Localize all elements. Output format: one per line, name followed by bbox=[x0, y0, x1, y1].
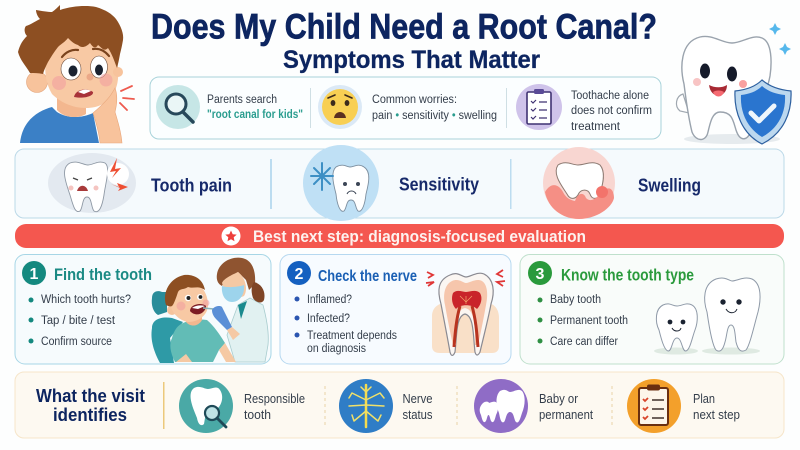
illustration: boy with toothache bbox=[18, 5, 134, 143]
panel: parent concerns bbox=[150, 77, 661, 139]
text: parents search bbox=[207, 94, 303, 121]
label bbox=[539, 392, 593, 422]
icon: magnifying glass bbox=[156, 85, 200, 129]
heading bbox=[36, 386, 145, 425]
text: common worries: Common worries: bbox=[372, 94, 457, 106]
heading: What the visit bbox=[36, 386, 145, 406]
title: Does My Child Need a Root Canal? bbox=[151, 8, 657, 46]
text: common worries: pain • sensitivity • swelling bbox=[372, 110, 497, 122]
heading: Check the nerve bbox=[318, 268, 417, 285]
illustration: smiling tooth with shield bbox=[676, 36, 791, 144]
icon: shield bbox=[735, 80, 791, 144]
badge 2 bbox=[287, 261, 311, 285]
illustration: dentist and child bbox=[151, 258, 268, 363]
list: Care can differ bbox=[550, 336, 618, 348]
list: Inflamed? bbox=[307, 294, 352, 306]
badge 3: 3 bbox=[536, 266, 545, 283]
icon: nerve status bbox=[339, 379, 393, 433]
subtitle: Symptoms That Matter bbox=[283, 46, 540, 74]
heading: Know the tooth type bbox=[561, 266, 694, 284]
text: toothache alone: Toothache alone bbox=[571, 90, 649, 102]
label: next step bbox=[693, 408, 740, 422]
text: toothache alone: treatment bbox=[571, 121, 621, 133]
illustration: baby tooth bbox=[654, 304, 698, 354]
label: sensitivity: Sensitivity bbox=[399, 174, 479, 194]
label bbox=[693, 392, 740, 422]
icon: plan clipboard bbox=[627, 379, 681, 433]
illustration: permanent tooth bbox=[702, 278, 760, 354]
list: on diagnosis bbox=[307, 343, 366, 355]
heading: Find the tooth bbox=[54, 265, 152, 284]
list bbox=[538, 294, 628, 348]
label: tooth pain: Tooth pain bbox=[151, 176, 232, 196]
text: parents search: Parents search bbox=[207, 94, 277, 106]
list: Infected? bbox=[307, 313, 350, 325]
list: Which tooth hurts? bbox=[41, 294, 131, 306]
label: permanent bbox=[539, 408, 593, 422]
text: toothache alone bbox=[571, 90, 652, 133]
list bbox=[28, 294, 131, 348]
card 1: find the tooth bbox=[15, 254, 271, 364]
label bbox=[402, 392, 433, 422]
card 3: know the tooth type bbox=[520, 254, 784, 364]
panel: symptoms bbox=[15, 145, 784, 221]
label: Nerve bbox=[402, 392, 433, 406]
heading: identifies bbox=[53, 405, 127, 425]
icon: swollen gum bbox=[543, 147, 615, 219]
icon: worried face bbox=[318, 85, 362, 129]
text: toothache alone: does not confirm bbox=[571, 105, 652, 117]
label: swelling: Swelling bbox=[638, 176, 701, 196]
panel: what the visit identifies bbox=[15, 372, 784, 438]
badge 1 bbox=[22, 261, 46, 285]
icon: sparkles bbox=[769, 23, 791, 55]
badge 2: 2 bbox=[295, 266, 304, 283]
badge 1: 1 bbox=[30, 266, 39, 283]
text: common worries bbox=[372, 94, 497, 122]
list: Confirm source bbox=[41, 336, 112, 348]
icon: baby or permanent bbox=[474, 379, 528, 433]
label: Plan bbox=[693, 392, 715, 406]
icon: tooth pain bbox=[48, 153, 136, 213]
list: Baby tooth bbox=[550, 294, 601, 306]
badge 3 bbox=[528, 261, 552, 285]
list: Permanent tooth bbox=[550, 315, 628, 327]
card 2: check the nerve bbox=[280, 254, 511, 364]
illustration: tooth cross-section bbox=[426, 270, 505, 355]
list: Tap / bite / test bbox=[41, 315, 116, 327]
banner: best next step: Best next step: diagnosis-focused evaluation bbox=[253, 228, 586, 246]
icon: sensitivity bbox=[303, 145, 379, 221]
list: Treatment depends bbox=[307, 330, 397, 342]
label: Baby or bbox=[539, 392, 578, 406]
label: tooth bbox=[244, 408, 271, 422]
label: status bbox=[402, 408, 432, 422]
icon: responsible tooth bbox=[179, 379, 233, 433]
label: Responsible bbox=[244, 392, 305, 406]
banner: best next step bbox=[15, 224, 784, 248]
icon: checklist bbox=[516, 84, 562, 130]
label bbox=[244, 392, 305, 422]
list bbox=[294, 294, 397, 355]
text: parents search: "root canal for kids" bbox=[207, 109, 303, 121]
